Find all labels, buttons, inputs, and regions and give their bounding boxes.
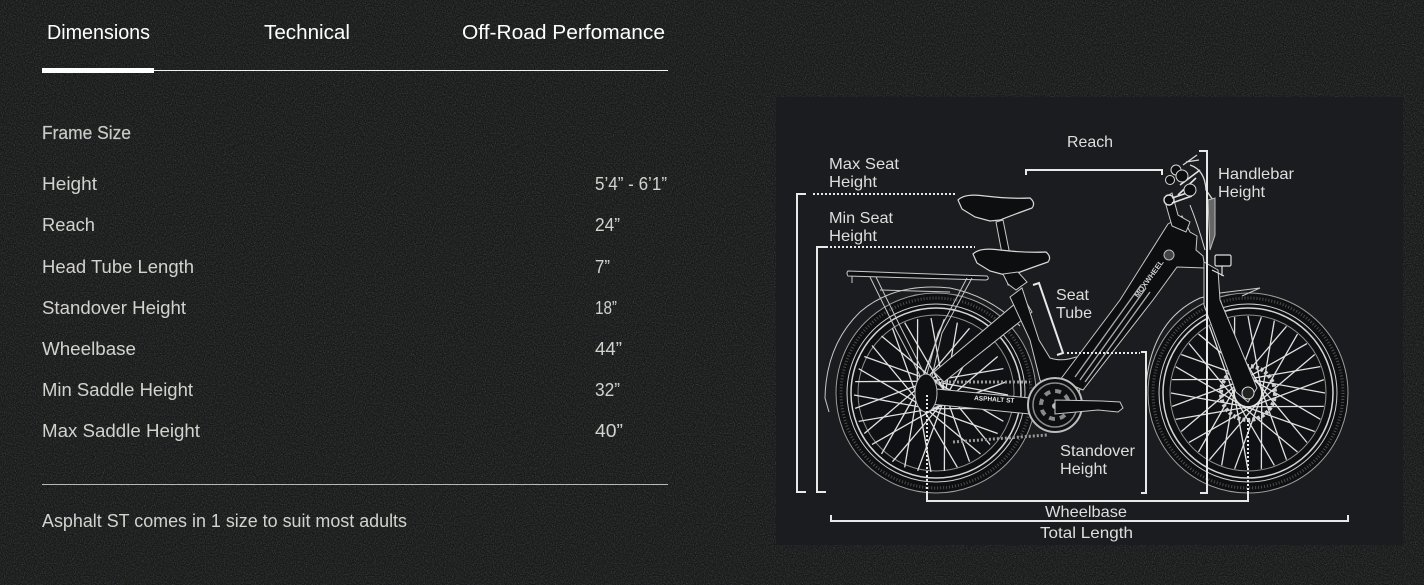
dimension: Max Seat Height [797, 156, 955, 492]
brake disc [1221, 366, 1275, 420]
dimension: Min Seat Height: Min Seat [829, 210, 894, 227]
panel: bike diagram background [776, 97, 1403, 545]
row: Reach [42, 215, 620, 235]
row: Max Saddle Height: 40” [595, 421, 623, 441]
saddle: max position [958, 195, 1034, 221]
front fender [1146, 288, 1260, 385]
row: Standover Height [42, 298, 617, 318]
dimension annotations [797, 134, 1348, 542]
dimension: Standover Height: Standover [1060, 443, 1136, 460]
row: Wheelbase [42, 339, 622, 359]
frame name: ASPHALT ST [974, 395, 1015, 405]
row: Reach: 24” [595, 215, 620, 235]
rear fender [825, 287, 1020, 412]
tab underline [42, 70, 668, 71]
dimension: Handlebar Height: Handlebar [1218, 166, 1295, 183]
tab: Off-Road Perfomance: Off-Road Perfomance [462, 22, 665, 44]
row: Standover Height: 18” [595, 298, 617, 318]
dimension: Wheelbase [927, 395, 1248, 521]
spec table [42, 123, 667, 441]
frame joint [1164, 250, 1174, 260]
dimension: Wheelbase: Wheelbase [1045, 504, 1127, 521]
dimension: Standover Height: Height [1060, 461, 1108, 478]
chain [937, 382, 1047, 442]
row: Standover Height: Standover Height [42, 298, 186, 318]
row: Max Saddle Height [42, 421, 623, 441]
rear cassette [915, 374, 937, 412]
chainring [1028, 378, 1082, 432]
rear wheel [836, 293, 1036, 493]
row: Wheelbase: 44” [595, 339, 622, 359]
dimension: Handlebar Height: Height [1218, 184, 1266, 201]
crank and pedal [1055, 400, 1123, 414]
bike illustration [825, 155, 1348, 493]
row: Min Saddle Height: 32” [595, 380, 620, 400]
headlight [1212, 255, 1231, 276]
tab: Dimensions: Dimensions [47, 22, 150, 44]
chain stay [926, 388, 1030, 414]
dimension: Seat Tube: Tube [1056, 305, 1092, 322]
dimension: Reach [1026, 134, 1162, 175]
fork [1204, 262, 1257, 402]
row: Height: Height [42, 174, 97, 194]
dimension: Seat Tube [1033, 283, 1092, 355]
row: Head Tube Length: 7” [595, 257, 610, 277]
row: Min Saddle Height [42, 380, 620, 400]
dimension: Reach: Reach [1067, 134, 1113, 151]
seat post [996, 220, 1016, 285]
front wheel [1148, 293, 1348, 493]
heading: Frame Size: Frame Size [42, 123, 131, 143]
logo on frame: MOXWHEEL [1132, 258, 1166, 299]
dimension: Min Seat Height [817, 210, 975, 492]
handlebar assembly [1164, 155, 1215, 250]
footnote: Asphalt ST comes in 1 size to suit most adults [42, 511, 407, 531]
rear rack [847, 271, 988, 385]
saddle: min position [973, 249, 1050, 275]
cable cover [1208, 198, 1215, 250]
tab bar [42, 22, 668, 73]
row: Head Tube Length [42, 257, 610, 277]
row: Wheelbase: Wheelbase [42, 339, 136, 359]
dimension: Total Length [831, 515, 1348, 542]
dimension: Standover Height [1060, 352, 1146, 493]
dimension: Seat Tube: Seat [1056, 287, 1090, 304]
dimension: Min Seat Height: Height [829, 228, 878, 245]
hub [1242, 387, 1254, 399]
dimension: Max Seat Height: Max Seat [829, 156, 900, 173]
row: Head Tube Length: Head Tube Length [42, 257, 194, 277]
seat stay [934, 297, 1032, 382]
row: Reach: Reach [42, 215, 95, 235]
down tube highlight [1075, 285, 1150, 382]
row: Height: 5’4” - 6’1” [595, 174, 667, 194]
tab: Technical: Technical [264, 22, 350, 44]
dimension: Handlebar Height [1199, 151, 1295, 493]
row: Min Saddle Height: Min Saddle Height [42, 380, 193, 400]
dimension: Max Seat Height: Height [829, 174, 878, 191]
active tab indicator [42, 68, 154, 73]
dimension: Total Length: Total Length [1040, 525, 1133, 542]
seat clamp [1003, 272, 1027, 290]
row: Height [42, 174, 667, 194]
row: Max Saddle Height: Max Saddle Height [42, 421, 200, 441]
down tube [1060, 216, 1205, 390]
seat tube and bottom frame [1010, 288, 1090, 405]
